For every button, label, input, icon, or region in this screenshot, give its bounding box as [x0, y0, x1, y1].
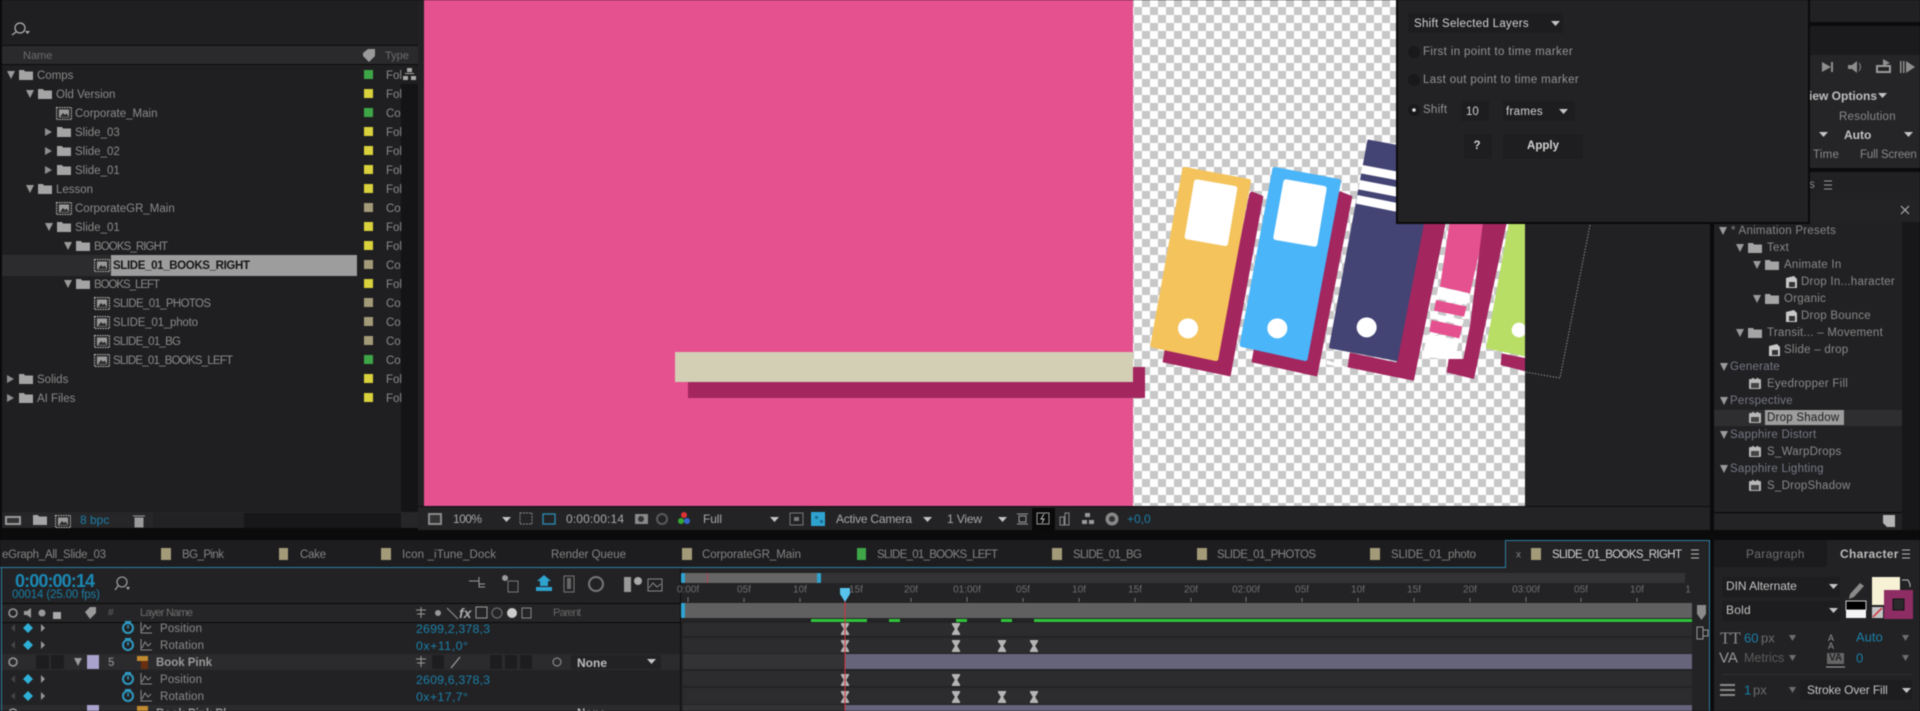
effect: S_WarpDrops: S_WarpDrops [1767, 446, 1842, 458]
books illustration [1153, 141, 1527, 380]
viewer footer bar [418, 506, 1710, 530]
tree row: SLIDE_01_BOOKS_LEFT: Co [386, 355, 401, 367]
layer row: Book Pink: None [577, 656, 607, 670]
time ruler: 03:00f [1512, 584, 1540, 596]
layer property: Position [11, 621, 490, 636]
search field [12, 23, 30, 35]
divider line [1722, 674, 1912, 675]
effect: Eyedropper Fill: Eyedropper Fill [1767, 378, 1848, 390]
tree row: Solids [7, 374, 402, 386]
time ruler: 20f [1463, 584, 1477, 596]
font size row [1720, 628, 1796, 648]
layer column header: Layer Name [140, 607, 193, 619]
effect category: Generate: Generate [1730, 361, 1780, 373]
tab: Graph_All_Slide_03: eGraph_All_Slide_03 [2, 549, 106, 561]
scrollbar strip [401, 84, 418, 528]
panel: character [1714, 540, 1920, 711]
font size row: px [1761, 630, 1775, 646]
tree row: SLIDE_01_photo: Co [386, 317, 401, 329]
book: yellow [1153, 169, 1263, 376]
preset: Transit Movement: Transit... – Movement [1767, 327, 1884, 339]
viewer footer bar: Active Camera [836, 512, 912, 526]
time ruler: 1 [1685, 584, 1691, 596]
tree row: BOOKS_RIGHT: Fol [386, 241, 402, 253]
tree row: Slide_01 old [45, 165, 402, 177]
tree row: Comps [7, 70, 402, 82]
tree row: Slide_02 [45, 146, 402, 158]
layer property: Rotation 2 [11, 689, 468, 704]
viewer footer bar: 1 View [947, 512, 982, 526]
preset: Text [1736, 242, 1790, 254]
layer property: Rotation [11, 638, 468, 653]
tab: SLIDE_01_PHOTOS: SLIDE_01_PHOTOS [1217, 549, 1316, 561]
default colour swatch [1846, 601, 1866, 618]
tab: active SLIDE_01_BOOKS_RIGHT: x [1516, 550, 1521, 560]
effect: Drop Shadow selected: Drop Shadow [1767, 412, 1840, 424]
tree row: Slide_01 lesson [45, 222, 402, 234]
layer column header: # [108, 608, 114, 618]
tab: active SLIDE_01_BOOKS_RIGHT [1516, 548, 1699, 561]
font size row: 60 [1744, 630, 1758, 646]
preset: Organic: Organic [1784, 293, 1826, 305]
font style dropdown [1722, 601, 1840, 621]
effects tab [1809, 179, 1909, 214]
tracking row: VA [1829, 652, 1842, 664]
preset: Animate In [1753, 259, 1841, 271]
time ruler: 10f [1630, 584, 1644, 596]
tracking row: 0 [1856, 650, 1863, 666]
time ruler: 15f [1128, 584, 1142, 596]
column header: Name [23, 50, 52, 62]
preset: Organic [1753, 293, 1826, 305]
tracking row [1826, 650, 1909, 667]
effect category: Perspective: Perspective [1730, 395, 1793, 407]
tree row: Corporate_Main [56, 108, 401, 120]
effect: Drop Shadow selected [1714, 410, 1902, 426]
project footer [2, 512, 418, 528]
time ruler: 02:00f [1232, 584, 1260, 596]
layer property: Position 2: 2609,6,378,3 [416, 673, 490, 687]
tree row: CorporateGR_Main: Co [386, 203, 401, 215]
panel: effects and presets [1714, 222, 1920, 530]
viewer footer bar: 100% [453, 512, 482, 526]
layer property: Position 2 [11, 672, 490, 687]
project footer: 8 bpc [80, 513, 109, 527]
layer row: Book Pink: Book Pink [156, 657, 213, 669]
tree row: Old Version [26, 89, 402, 101]
preview option labels: Resolution [1839, 111, 1896, 123]
playhead [840, 588, 850, 711]
tab: Cake [279, 548, 326, 561]
column header: Type [385, 50, 409, 62]
preview option labels: Time [1813, 149, 1839, 161]
time navigator [681, 573, 1685, 583]
layer property: Rotation 2: Rotation [160, 691, 204, 703]
swap colours icon [1902, 580, 1910, 587]
shelf [675, 352, 1133, 382]
tab: Cake: Cake [300, 549, 326, 561]
tree row: AI Files [7, 393, 402, 405]
shelf shadow [688, 367, 1145, 398]
tab: Paragraph [1714, 540, 1827, 567]
tree row: Corporate_Main: Corporate_Main [75, 108, 157, 120]
tree row: Solids: Solids [37, 374, 69, 386]
tree row: SLIDE_01_BG: Co [386, 336, 401, 348]
tree row: Old Version: Old Version [56, 89, 115, 101]
track rows [683, 623, 1692, 711]
tree row: SLIDE_01_PHOTOS [94, 298, 401, 310]
tab: Character: Character [1840, 547, 1899, 561]
tree row: Slide_01 lesson: Fol [386, 222, 402, 234]
tree row: Slide_03 [45, 127, 402, 139]
preview option labels: iew Options [1809, 89, 1877, 103]
layer column header: fx [459, 605, 473, 621]
tree row: selected comp [2, 255, 401, 276]
time ruler: 10f [1072, 584, 1086, 596]
time ruler: 05f [1016, 584, 1030, 596]
time ruler: 15f [849, 584, 863, 596]
pink composition background [424, 0, 1133, 506]
radio: last out point: Last out point to time marker [1423, 74, 1579, 86]
tab: active SLIDE_01_BOOKS_RIGHT: SLIDE_01_BOOKS_RIGHT [1552, 549, 1682, 561]
fill colour swatch [1872, 577, 1900, 605]
button: apply [1503, 134, 1583, 159]
tree row: Slide_02: Fol [386, 146, 402, 158]
layer column header: Parent [553, 607, 581, 619]
tab: Icon iTune Dock: Icon _iTune_Dock [402, 549, 496, 561]
viewer footer bar: Full [703, 512, 722, 526]
layer column header [2, 603, 681, 623]
time ruler: 05f [1574, 584, 1588, 596]
dropdown: Shift Selected Layers: Shift Selected Layers [1414, 18, 1529, 30]
leading row: A [1828, 633, 1834, 643]
font style dropdown: Bold [1726, 603, 1751, 617]
side icon [1697, 627, 1708, 639]
time ruler: 05f [1295, 584, 1309, 596]
tab: BG_Pink: BG_Pink [182, 549, 224, 561]
effects tab: s [1809, 179, 1815, 191]
font family dropdown: DIN Alternate [1726, 579, 1797, 593]
time ruler: 01:00f [953, 584, 981, 596]
time ruler: 20f [904, 584, 918, 596]
column header [2, 45, 418, 65]
timeline search [115, 577, 130, 590]
stroke order dropdown: Stroke Over Fill [1807, 683, 1888, 697]
tab: SLIDE_01_photo: SLIDE_01_photo [1391, 549, 1476, 561]
tree row: SLIDE_01_photo: SLIDE_01_photo [113, 317, 198, 329]
transparency checkerboard [1133, 0, 1525, 506]
timeline toolbar icons [469, 575, 662, 592]
tab: CorporateGR_Main: CorporateGR_Main [702, 549, 801, 561]
time ruler: 10f [793, 584, 807, 596]
tree row: SLIDE_01_BOOKS_LEFT: SLIDE_01_BOOKS_LEFT [113, 355, 233, 367]
tree row: Lesson: Fol [386, 184, 402, 196]
button: help [1464, 134, 1492, 159]
preset: Animation Presets: * Animation Presets [1731, 225, 1836, 237]
preset: Animate In: Animate In [1784, 259, 1841, 271]
preview option labels: Auto [1844, 128, 1871, 142]
icon: flowchart [403, 68, 416, 80]
tab: SLIDE_01_BOOKS_LEFT: SLIDE_01_BOOKS_LEFT [877, 549, 998, 561]
dotted layer bounds [1525, 225, 1590, 378]
tree row: BOOKS_LEFT: BOOKS_LEFT [94, 279, 160, 291]
tree row: Slide_01 lesson: Slide_01 [75, 222, 120, 234]
time ruler: 15f [1407, 584, 1421, 596]
stroke order dropdown [1800, 680, 1912, 700]
tree row: CorporateGR_Main: CorporateGR_Main [75, 203, 175, 215]
viewer footer bar: +0,0 [1127, 512, 1151, 526]
tree row: BOOKS_LEFT [64, 279, 402, 291]
layer row: Book Pink Pl cropped [2, 705, 681, 711]
playback icons [1822, 59, 1915, 73]
layer property: Rotation: Rotation [160, 640, 204, 652]
tree row: SLIDE_01_BOOKS_LEFT [94, 354, 401, 367]
layer property: Position: Position [160, 623, 202, 635]
tree row: selected comp: SLIDE_01_BOOKS_RIGHT [113, 260, 250, 272]
tree row: Comps: Fol [386, 70, 402, 82]
stroke width row: px [1753, 682, 1767, 698]
layer property: Position: 2699,2,378,3 [416, 622, 490, 636]
leading row: A [1828, 641, 1834, 651]
tab: SLIDE_01_BG: SLIDE_01_BG [1073, 549, 1142, 561]
dropdown: Shift Selected Layers [1408, 13, 1563, 33]
layer duration bars [845, 654, 1692, 711]
tab: Paragraph: Paragraph [1746, 547, 1805, 561]
tree row: Old Version: Fol [386, 89, 402, 101]
radio: shift value [1408, 101, 1575, 121]
layer row: Book Pink: 5 [108, 657, 115, 669]
tree row: BOOKS_RIGHT: BOOKS_RIGHT [94, 241, 168, 253]
preset: Drop Bounce: Drop Bounce [1801, 310, 1871, 322]
leading row [1828, 630, 1909, 651]
leading row: Auto [1856, 630, 1883, 644]
panel: project [2, 0, 418, 528]
time ruler: 20f [1184, 584, 1198, 596]
tree row: selected comp: Co [386, 260, 401, 272]
tree row: BOOKS_RIGHT [64, 241, 402, 253]
tree row: Slide_03: Fol [386, 127, 402, 139]
viewer footer bar: 0:00:00:14 [566, 512, 624, 526]
tree row: Lesson: Lesson [56, 184, 93, 196]
new preset icon [1883, 515, 1895, 527]
tree row: CorporateGR_Main [56, 202, 401, 215]
green render bar [811, 619, 1692, 622]
kerning row [1719, 650, 1796, 666]
work area bar [681, 603, 1706, 620]
radio: shift value: Shift [1423, 104, 1448, 116]
preset: Text: Text [1767, 242, 1790, 254]
time ruler: 0:00f [677, 584, 699, 596]
layer property: Rotation 2: 0x+17,7° [416, 690, 468, 704]
timeline tab bar [0, 540, 1710, 711]
panel: composition viewer [418, 0, 1710, 530]
preview option labels [1809, 89, 1917, 161]
layer property: Rotation: 0x+11,0° [416, 639, 468, 653]
tree row: AI Files: Fol [386, 393, 402, 405]
tree row: SLIDE_01_BG [94, 336, 401, 348]
current time display: 00014 (25.00 fps) [12, 589, 100, 601]
book: blue [1242, 169, 1352, 376]
tree row: Comps: Comps [37, 70, 74, 82]
book: navy striped [1327, 141, 1445, 380]
button: help: ? [1473, 140, 1481, 152]
tree row: Slide_01 old: Fol [386, 165, 402, 177]
panel: timeline layer list [0, 568, 681, 711]
tree row: Solids: Fol [386, 374, 402, 386]
tree row: SLIDE_01_photo [94, 316, 401, 329]
tab: Render Queue: Render Queue [551, 549, 626, 561]
tree row: SLIDE_01_PHOTOS: SLIDE_01_PHOTOS [113, 298, 211, 310]
floating script panel: shift layers [1396, 0, 1810, 224]
layer property: Position 2: Position [160, 674, 202, 686]
preset: Slide drop: Slide – drop [1784, 344, 1848, 356]
book: green [1486, 220, 1527, 372]
tree row: SLIDE_01_PHOTOS: Co [386, 298, 401, 310]
radio: first in point: First in point to time marker [1423, 46, 1573, 58]
tree row: Corporate_Main: Co [386, 108, 401, 120]
tree row: BOOKS_LEFT: Fol [386, 279, 402, 291]
stroke width row [1720, 682, 1796, 698]
stroke colour swatch [1884, 590, 1913, 619]
time ruler: 05f [737, 584, 751, 596]
kerning row: Metrics [1744, 651, 1784, 665]
current time display [12, 571, 100, 601]
tab: BG_Pink [161, 548, 224, 561]
current time display: 0:00:00:14 [15, 571, 95, 591]
tree row: Slide_03: Slide_03 [75, 127, 120, 139]
tree row: Slide_02: Slide_02 [75, 146, 120, 158]
effect category: Sapphire Lighting: Sapphire Lighting [1730, 463, 1824, 475]
button: apply: Apply [1527, 140, 1560, 152]
kerning row: VA [1719, 650, 1738, 666]
preview option labels: Full Screen [1860, 149, 1917, 161]
tree row: SLIDE_01_BG: SLIDE_01_BG [113, 336, 181, 348]
panel: timeline graph [677, 568, 1709, 711]
effect category: Sapphire Distort: Sapphire Distort [1730, 429, 1817, 441]
font family dropdown [1722, 577, 1840, 597]
preset: Drop In character: Drop In...haracter [1801, 276, 1895, 288]
radio: shift value: 10 [1466, 106, 1479, 118]
layer row: Book Pink [2, 654, 681, 670]
book: pink striped [1422, 220, 1507, 379]
effect: S_DropShadow: S_DropShadow [1767, 480, 1851, 492]
icon: eyedropper [1849, 583, 1864, 599]
time ruler [677, 584, 1691, 602]
tree row: Slide_01 old: Slide_01 [75, 165, 120, 177]
panel: right top controls [1714, 0, 1920, 222]
time ruler: 10f [1351, 584, 1365, 596]
tree row: AI Files: AI Files [37, 393, 76, 405]
font size row: TT [1720, 628, 1741, 648]
radio: shift value: frames [1506, 106, 1543, 118]
none swatch [1872, 607, 1883, 618]
stroke width row: 1 [1744, 682, 1751, 698]
keyframes [841, 623, 1038, 703]
tree row: Lesson [26, 184, 402, 196]
